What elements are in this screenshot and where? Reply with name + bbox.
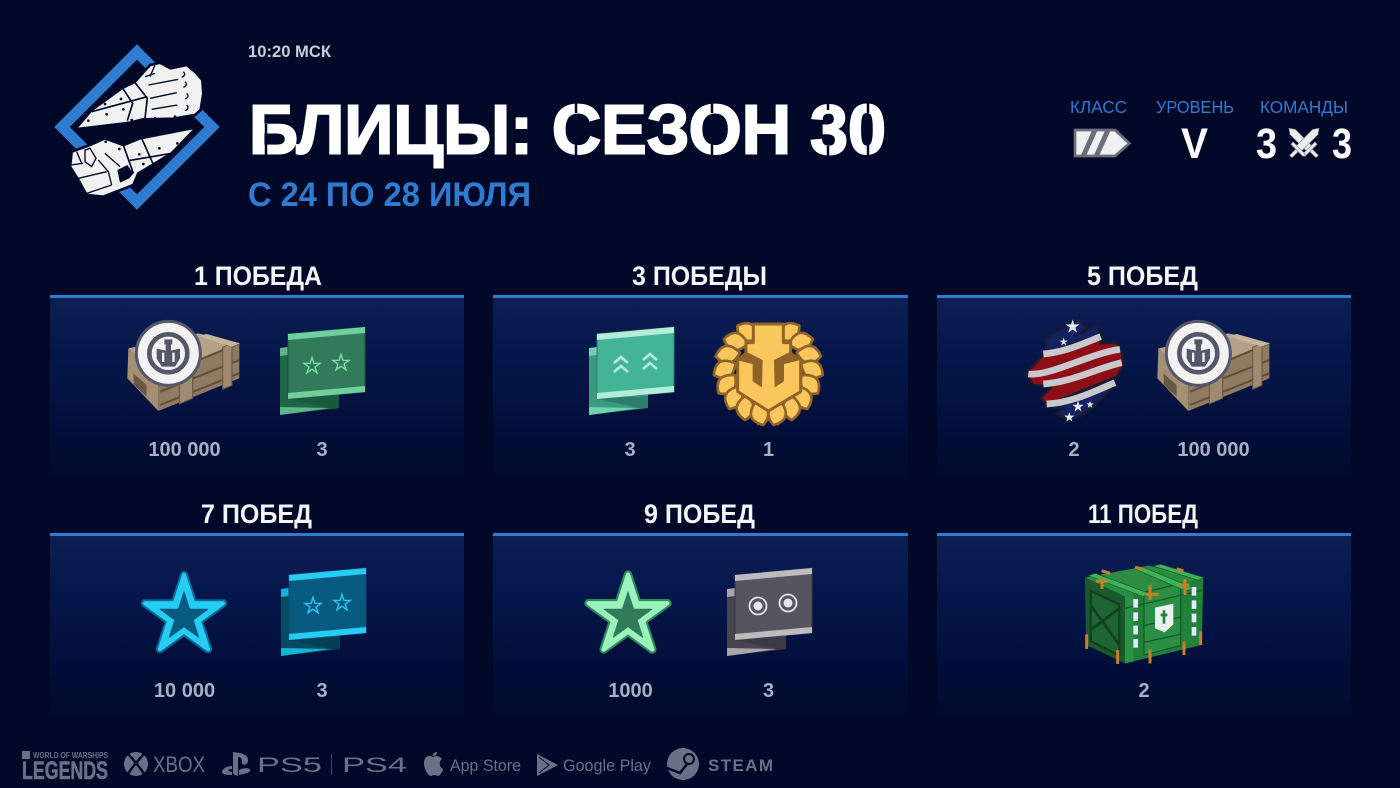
icon: credits crate [1157,321,1270,411]
logo: World of Warships Legends [22,751,109,785]
value: containers: 2 [1138,680,1150,702]
heading: 11 wins: 11 ПОБЕД [1088,499,1198,529]
heading: 7 wins: 7 ПОБЕД [201,499,312,529]
logo: PlayStation 5 / 4 [222,752,408,777]
info: teams [1256,97,1352,168]
value: flags: 2 [1068,439,1080,461]
heading: 9 wins: 9 ПОБЕД [644,499,755,529]
icon: american flag camouflage [1026,319,1124,422]
logo: App Store [424,752,521,776]
value: ribbons: 3 [763,680,774,702]
logo: World of Warships Legends: LEGENDS [22,757,108,785]
value: ribbons: 3 [624,439,636,461]
logo: crossed gauntlets in diamond [62,52,212,202]
info: class: КЛАСС [1070,97,1127,117]
info: class [1070,97,1129,156]
icon: blue star [145,575,223,649]
heading: 3 wins: 3 ПОБЕДЫ [632,261,767,291]
icon: teal chevron ribbon [589,327,674,415]
info: level: УРОВЕНЬ [1156,97,1234,117]
footer: platform logos [22,748,773,785]
logo: PlayStation 5 / 4: PS4 [342,754,408,777]
icon: gold laurel medal [710,318,827,428]
icon: grey ribbon [727,568,812,656]
info: level: V [1181,120,1208,168]
icon: green star ribbon [280,327,365,415]
value: ribbons: 3 [316,439,328,461]
heading: 5 wins: 5 ПОБЕД [1087,261,1198,291]
value: credits: 100 000 [148,439,221,461]
value: credits: 100 000 [1177,439,1250,461]
panel: 3 wins [493,261,908,490]
info: teams: 3 [1332,120,1352,168]
panel: 1 win [50,261,464,490]
value: green stars: 1000 [608,680,653,702]
logo: Steam: STEAM [708,756,773,775]
icon: credits crate [127,321,240,411]
logo: Steam [667,748,773,780]
icon: blue ribbon [281,568,366,656]
logo: Google Play [537,754,651,776]
icon: green container [1085,564,1204,664]
value: ribbons: 3 [316,680,328,702]
title: БЛИЦЫ: СЕЗОН 30 [249,90,886,168]
heading: 1 win: 1 ПОБЕДА [194,261,322,291]
value: medal: 1 [763,439,774,461]
logo: PlayStation 5 / 4: PS5 [257,754,322,777]
logo: Google Play: Google Play [563,756,651,775]
logo: Xbox: XBOX [153,752,205,777]
logo: App Store: App Store [450,756,521,775]
logo: Xbox [124,752,205,777]
logo: World of Warships Legends: WORLD OF WARSHIPS [33,751,109,760]
info: teams: КОМАНДЫ [1260,97,1348,117]
panel: 5 wins [937,261,1351,490]
panel: 11 wins [937,499,1351,728]
info: level [1156,97,1234,168]
icon: green star [589,574,667,650]
panel: 9 wins [493,499,908,728]
info: teams: 3 [1256,120,1277,168]
time: 10:20 МСК [248,43,332,61]
subtitle: dates: С 24 ПО 28 ИЮЛЯ [248,176,531,214]
panel: 7 wins [50,499,464,728]
value: blue stars: 10 000 [154,680,215,702]
